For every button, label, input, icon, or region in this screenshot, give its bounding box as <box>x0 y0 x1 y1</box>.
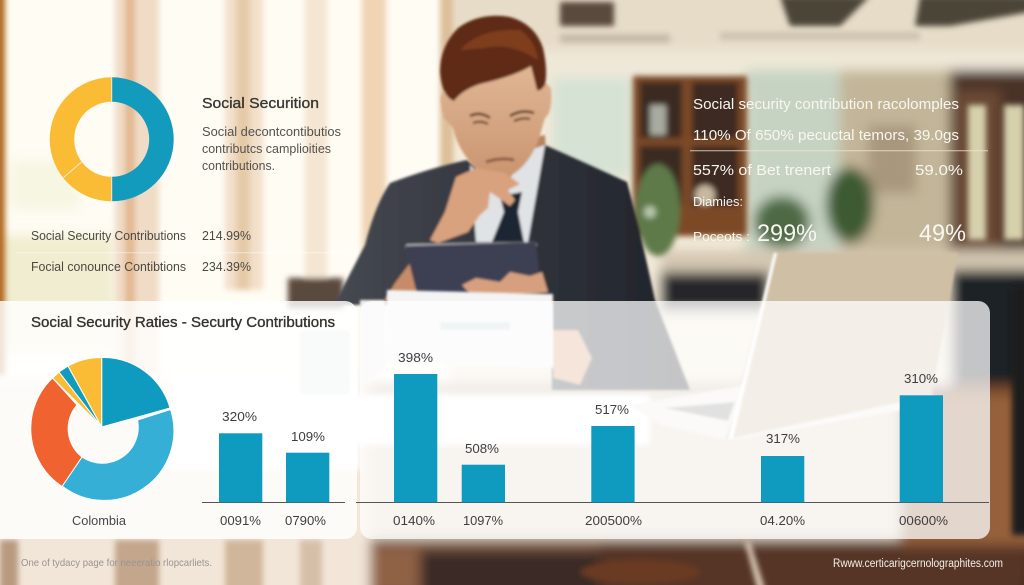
man reading tablet <box>335 16 690 390</box>
bar chart: right: 517% <box>595 402 629 417</box>
bar chart: right: 508% <box>465 441 499 456</box>
bar chart: right: 317% <box>766 431 800 446</box>
text block: description: Social decontcontibutios <box>202 125 341 139</box>
text block: description: contributions. <box>202 159 275 173</box>
laptop <box>630 253 958 440</box>
panel: right chart panel <box>360 301 990 539</box>
stats block: contribution examples: 299% <box>757 220 817 247</box>
table: contribution rows <box>16 228 350 274</box>
heading: social security: Social Securition <box>202 95 319 112</box>
bar chart: left: 109% <box>291 429 325 444</box>
stats block: contribution examples: 557% of Bet trenert <box>693 162 832 179</box>
bar chart: left: 320% <box>222 409 257 424</box>
bar chart: right <box>356 350 989 528</box>
bar chart: right: 1097% <box>463 513 503 528</box>
stats block: contribution examples: 49% <box>919 220 966 247</box>
bar chart: right: 0140% <box>393 513 435 528</box>
footer url: Rwww.certicarigcernolographites.com <box>833 558 1003 570</box>
bar chart: right: 00600% <box>899 513 948 528</box>
bar chart: right: 310% <box>904 371 938 386</box>
pie label: Colombia <box>72 513 127 528</box>
stats block: contribution examples: Social security contribution racolomples <box>693 96 959 113</box>
table: contribution rows: 214.99% <box>202 228 251 243</box>
stats block: contribution examples: 110% Of 650% pecuctal temors, 39.0gs <box>693 127 959 144</box>
bar chart: right: 200500% <box>585 513 642 528</box>
table: contribution rows: Focial conounce Contibtions <box>31 259 186 274</box>
heading: chart section: Social Security Raties - Securty Contributions <box>31 314 335 331</box>
bar chart: left: 0091% <box>220 513 261 528</box>
footer note: One of tydacy page for neeeratio rlopcarliets. <box>21 557 212 569</box>
paper on desk <box>300 290 592 395</box>
stats block: contribution examples <box>690 96 988 247</box>
table: contribution rows: Social Security Contributions <box>31 228 186 243</box>
donut chart: contributions <box>50 77 174 201</box>
bar chart: right: 398% <box>398 350 433 365</box>
text block: description <box>202 125 341 173</box>
stats block: contribution examples: Poceots : <box>693 229 750 244</box>
table: contribution rows: 234.39% <box>202 259 251 274</box>
pie chart: colombia <box>31 357 174 500</box>
bar chart: right: 04.20% <box>760 513 805 528</box>
panel: left chart panel <box>0 301 357 539</box>
bar chart: left <box>202 409 345 528</box>
stats block: contribution examples: Diamies: <box>693 195 743 209</box>
stats block: contribution examples: 59.0% <box>915 162 963 179</box>
bar chart: left: 0790% <box>285 513 326 528</box>
text block: description: contributcs camplioities <box>202 142 331 156</box>
